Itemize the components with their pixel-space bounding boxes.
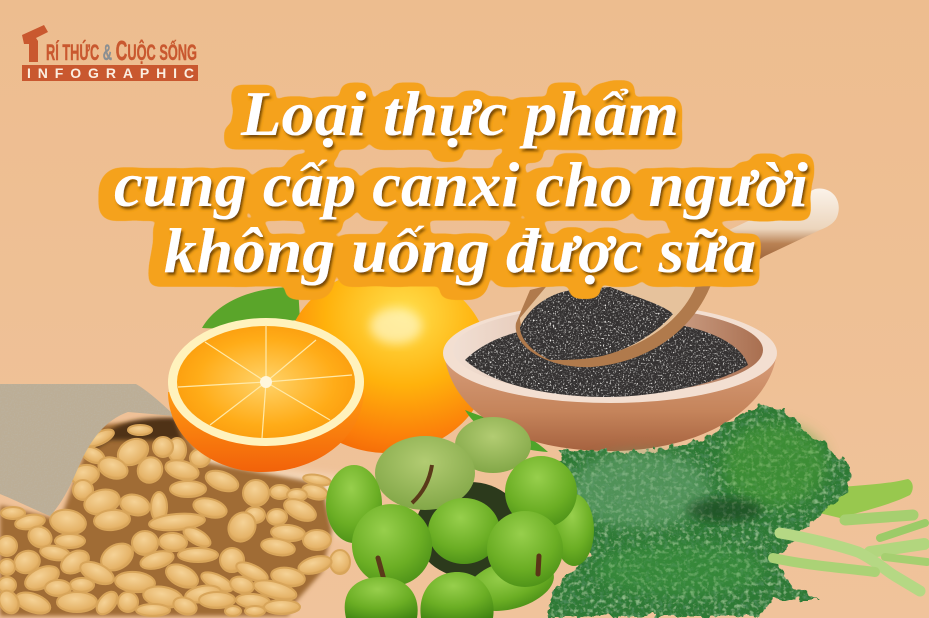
bowl rim [443,303,777,403]
kale top stem bundle [806,479,913,518]
bowl outer [444,352,777,451]
title line 3: không uống được sữa [164,215,756,286]
almond pile gaps [0,420,332,616]
kale shadow between leaves [687,498,763,522]
sack mouth shadow [85,418,182,455]
almonds [0,425,350,618]
green leaf under bowl [465,410,548,452]
title line 1: Loại thực phẩm [240,78,679,149]
kale bright upper tone [723,423,827,507]
orange leaf [202,287,300,328]
illustration: chia spoon handle [725,189,839,262]
chia mound in bowl [465,325,748,397]
chia in spoon [520,287,673,360]
illustration: chia seeds in wooden bowl [443,250,777,452]
whole orange highlight [370,308,422,344]
bowl inside [453,306,763,394]
illustration: almonds in burlap sack [0,384,352,618]
logo: Tri Thuc & Cuoc Song Infographic [22,25,198,81]
title [114,78,808,286]
burlap sack [0,384,175,516]
front fruits [326,465,382,543]
whole orange [285,269,489,453]
faded back fruits [455,417,531,473]
cut orange face [168,318,364,446]
illustration: kale [548,404,927,616]
logo mark: T [22,25,48,62]
kale stems [773,515,927,591]
spoon bowl [516,250,740,367]
illustration: Indian gooseberries (amla) [326,417,594,618]
cut orange body [168,392,364,472]
logo wordmark: RÍ THỨC & CUỘC SỐNG [46,35,197,66]
dark gaps between fruit [415,482,525,578]
illustration: oranges [168,269,489,472]
almond pile pale shadow [170,445,352,540]
kale lower curly tone [595,544,765,596]
kale leaf mass [548,404,852,616]
back fruits [554,494,594,566]
logo bar: INFOGRAPHIC: INFOGRAPHIC [27,65,194,81]
kale pale left tone [570,452,710,528]
title line 2: cung cấp canxi cho người [114,149,808,220]
